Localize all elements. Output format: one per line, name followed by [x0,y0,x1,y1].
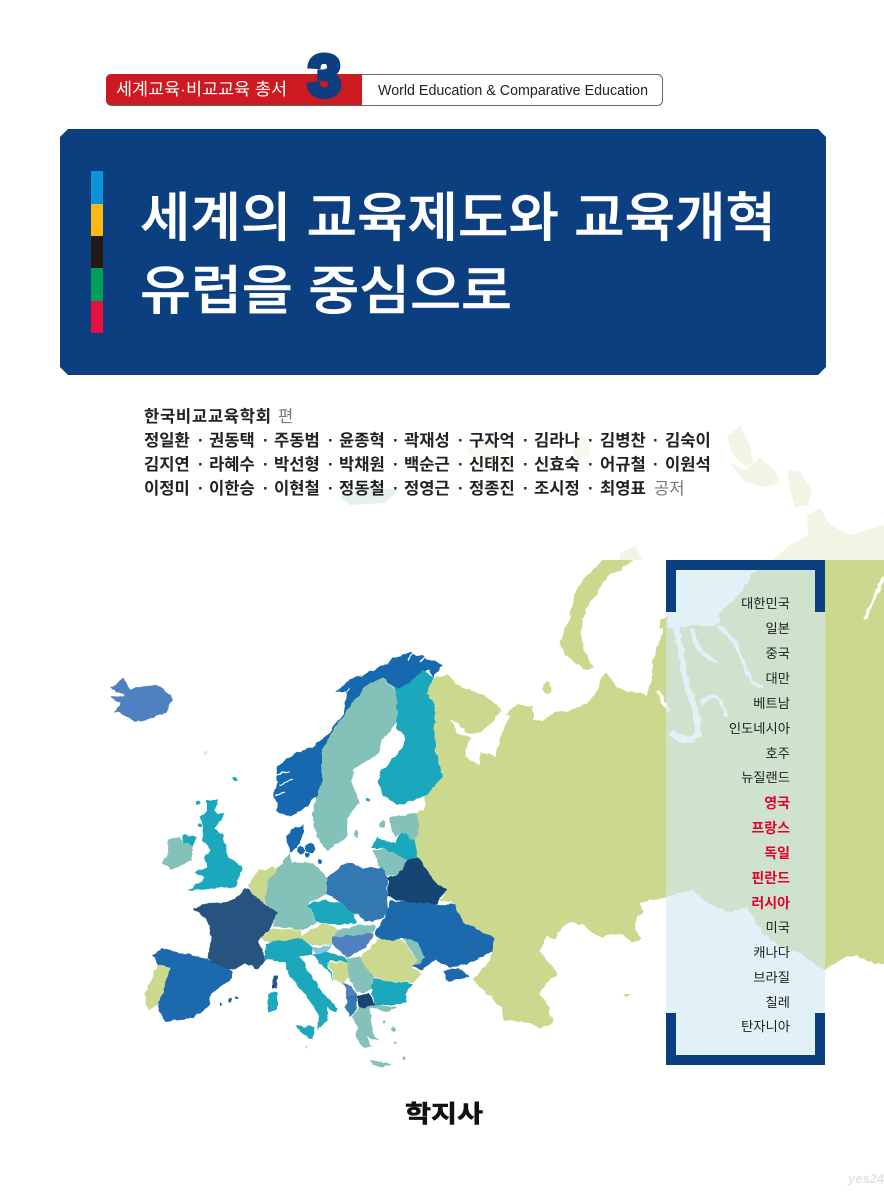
author row 2: 어규철 [600,455,646,474]
watermark: yes24 [847,1171,884,1186]
title text: 유럽을 중심으로 [140,262,512,321]
author row 3: 이한승 [209,479,255,498]
author row 1: 윤종혁 [339,431,385,450]
author row 3: · [458,479,464,498]
author row 2: · [653,455,659,474]
small islands [196,751,386,1048]
lithuania [373,848,407,875]
author row 3: 정종진 [469,479,515,498]
france [193,888,277,970]
serbia [348,957,373,993]
author row 2: · [263,455,269,474]
author row 1: · [198,431,204,450]
ireland [162,837,193,870]
author row 2: 이원석 [665,455,711,474]
country names [729,596,790,1034]
title text [140,189,776,321]
portugal [145,963,170,1010]
author row 2: · [523,455,529,474]
slovakia [335,925,375,937]
country names: 대만 [766,671,790,686]
croatia [312,952,348,982]
author row 2: 라혜수 [209,455,255,474]
author row 2: · [588,455,594,474]
country names: 탄자니아 [741,1019,790,1034]
author row 2: 신효숙 [534,455,580,474]
author row 2: · [328,455,334,474]
country names: 베트남 [753,696,790,711]
country names: 독일 [764,845,790,861]
greece [352,1005,405,1067]
author row 3: · [198,479,204,498]
author row 3: 정영근 [404,479,450,498]
corsica [273,975,278,988]
country names: 영국 [764,795,790,811]
slovenia [310,945,333,955]
denmark [287,825,322,863]
series name: 세계교육·비교교육 총서 [116,80,287,99]
latvia [372,832,417,860]
colour bar [91,171,103,333]
poland [327,862,388,923]
author row 2: 박채원 [339,455,385,474]
bottom bracket [666,1013,825,1065]
country names: 칠레 [766,995,790,1010]
author row 1: · [328,431,334,450]
author row 1: 구자억 [469,431,515,450]
editor: 편 [278,407,293,426]
editor: 한국비교교육학회 [144,407,271,426]
romania [360,937,422,982]
country names: 대한민국 [741,596,790,611]
sicily and sardinia [268,992,315,1040]
author row 2: · [198,455,204,474]
country names: 러시아 [751,895,790,911]
series badge [106,44,662,109]
author row 1: 정일환 [144,431,190,450]
author row 1: · [588,431,594,450]
author row 3: 정동철 [339,479,385,498]
author row 3: 조시정 [534,479,580,498]
map of europe and russia [110,550,884,1067]
bosnia [327,962,348,985]
ukraine [375,900,496,970]
benelux [247,868,277,903]
author row 3: · [263,479,269,498]
author row 1: 권동택 [209,431,255,450]
north macedonia [357,993,375,1008]
author row 1: 곽재성 [404,431,450,450]
country names: 미국 [766,920,790,935]
estonia [390,813,420,840]
country names: 핀란드 [751,870,790,886]
author row 3: · [523,479,529,498]
author row 2: 백순근 [404,455,450,474]
united kingdom [188,800,242,891]
northern ireland [182,835,197,847]
country names: 호주 [766,746,790,761]
author row 1: · [458,431,464,450]
country names: 캐나다 [753,945,790,960]
author row 1: · [393,431,399,450]
italy [265,938,338,1030]
switzerland [260,928,303,943]
moldova [403,937,425,968]
author row 1: 김숙이 [665,431,711,450]
crimea [443,968,470,983]
author row 3: 최영표 [600,479,646,498]
novaya zemlya [559,560,633,670]
top bracket [666,560,825,612]
publisher logo: 학지사 [405,1101,483,1128]
norway fjords [275,652,427,796]
germany [265,853,327,930]
author row 1: 김라나 [534,431,580,450]
panel: country list [666,560,825,1065]
faded arctic background [340,426,884,560]
panel: title [60,129,826,375]
author row 3: 이정미 [144,479,190,498]
white sea and rivers [450,578,884,765]
hungary [333,933,375,957]
norway [273,652,443,817]
author row 1: 주동범 [274,431,320,450]
finland [378,670,443,805]
author row 2: 박선형 [274,455,320,474]
russia [415,550,884,1028]
spain [153,949,233,1022]
author row 1: · [523,431,529,450]
author row 1: 김병찬 [600,431,646,450]
country names: 브라질 [753,970,790,985]
austria [300,923,338,945]
country names: 중국 [766,646,790,661]
author row 1: · [653,431,659,450]
sweden [312,678,397,850]
english series name: World Education & Comparative Education [378,83,648,99]
author row 1: · [263,431,269,450]
iceland [110,678,173,722]
title text: 세계의 교육제도와 교육개혁 [140,189,776,248]
author row 3: 이현철 [274,479,320,498]
country names: 뉴질랜드 [741,770,790,785]
author row 3: · [328,479,334,498]
bulgaria [371,978,413,1005]
series number: 3 [308,44,341,109]
montenegro [343,982,357,995]
country names: 프랑스 [751,820,790,836]
author row 2: 신태진 [469,455,515,474]
author row 3: 공저 [654,479,685,498]
belarus [387,857,447,907]
country names: 인도네시아 [729,721,790,736]
author row 2: · [393,455,399,474]
author row 2: · [458,455,464,474]
albania [345,995,357,1017]
author row 2: 김지연 [144,455,190,474]
author row 3: · [588,479,594,498]
author row 3: · [393,479,399,498]
czechia [307,900,357,925]
country names: 일본 [766,621,790,636]
authors [144,407,711,498]
